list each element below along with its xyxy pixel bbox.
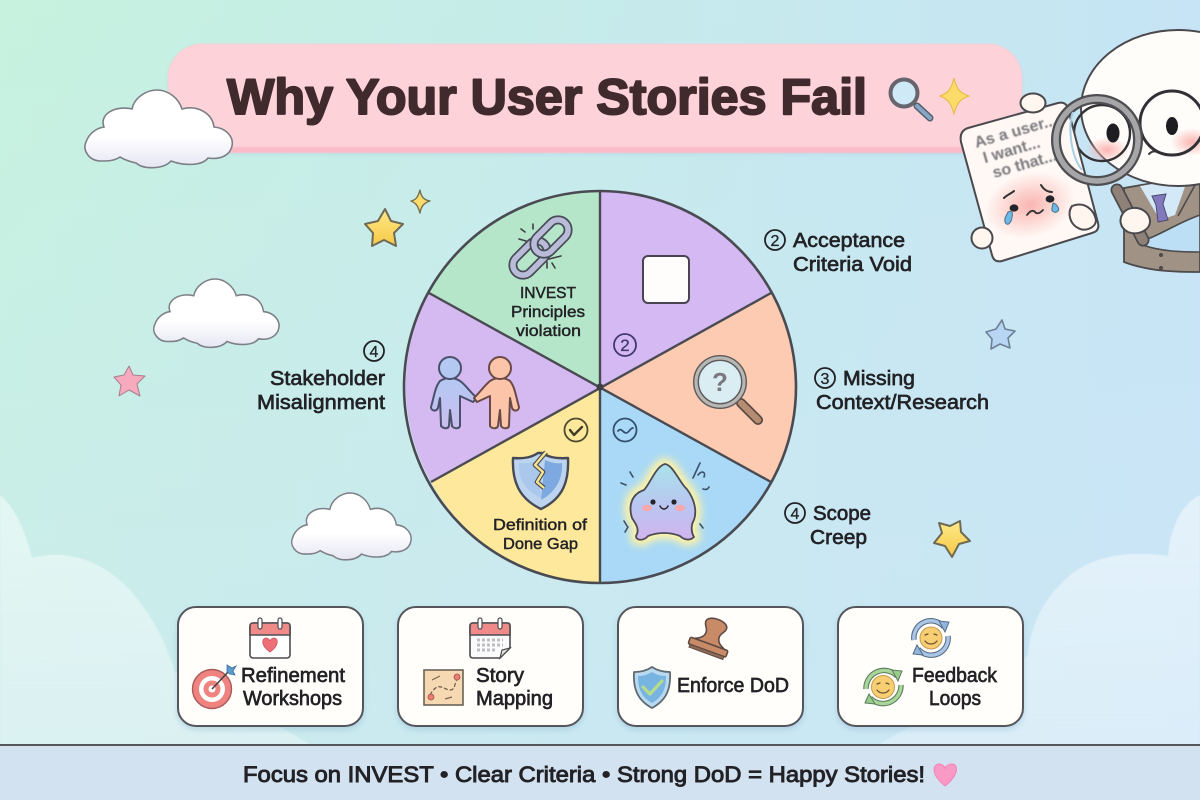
badge: 2: 2 [620,336,630,355]
star: blue [986,320,1015,349]
label: Missing Context/Research: Context/Research [816,392,989,414]
text: Loops [929,688,981,710]
card: Story Mapping [398,607,583,726]
sad user story document: so that... [991,148,1059,182]
star: yellow right [934,521,970,557]
icon: broken chain [509,216,572,279]
icon: stamp [687,613,737,660]
icon: map [424,670,463,705]
icon: target [192,665,236,708]
icon: title sparkle [940,78,969,114]
sad user story document: As a user... [973,112,1059,152]
icon: calendar heart [250,618,290,658]
text [476,665,553,710]
label: Scope Creep: 4 [791,506,800,523]
text: Definition of Done: Definition of [493,517,588,534]
icon: question magnifier: ? [712,367,728,397]
label: Acceptance Criteria Void: Acceptance [793,230,905,252]
card: Feedback Loops [838,607,1023,726]
star: pink [114,366,145,396]
title: Why Your User Stories Fail [227,69,867,125]
background cloud right [878,495,1200,745]
label: Acceptance Criteria Void: Criteria Void [793,254,912,276]
label: Stakeholder Misalignment: Misalignment [257,392,385,414]
slice: stakeholder [406,293,600,482]
label: Stakeholder Misalignment [257,341,385,414]
text: INVEST: INVEST [520,285,576,302]
text: INVEST [511,285,585,340]
text: Feedback [912,665,998,687]
text: Mapping [476,688,553,710]
label: Scope Creep: Scope [813,503,871,525]
cloud lower [292,493,411,560]
text: INVEST: Principles [511,304,585,321]
text: Definition of Done: Done Gap [503,536,578,553]
label: Acceptance Criteria Void [765,230,912,276]
icon: stakeholders shaking hands [431,357,519,428]
footer text: Focus on INVEST • Clear Criteria • Strong DoD = Happy Stories! [243,762,925,787]
badge: 2 [614,334,636,356]
label: Stakeholder Misalignment: 4 [370,344,379,361]
text [912,665,998,710]
magnifying glass [1056,99,1143,240]
icon: calendar [470,618,510,658]
text: Refinement [241,665,345,687]
title banner [168,44,1022,155]
sad user story document: I want... [981,135,1042,167]
label: Missing Context/Research [815,368,989,414]
sad user story document [961,103,1098,261]
text: Workshops [243,688,342,710]
text: Enforce DoD [677,675,789,697]
slice: scope creep [600,387,771,584]
icon: green feedback loop [865,670,902,704]
slice: INVEST [429,190,600,387]
card: Enforce DoD [618,607,803,726]
text: INVEST: violation [516,323,581,340]
icon: empty checkbox [643,256,689,303]
label: Scope Creep: Creep [810,527,867,549]
text: Story [476,665,524,687]
character: detective with sad user story [961,30,1200,272]
character body [1124,175,1200,272]
label: Missing Context/Research: 3 [821,371,830,388]
label: Missing Context/Research: Missing [843,368,915,390]
slice: missing context [600,293,795,482]
icon: broken shield [513,452,568,509]
footer bar [0,745,1200,800]
icon: pink heart [934,764,956,786]
icon: shield check [634,667,670,708]
person: blue [431,357,477,428]
person: orange [474,357,519,428]
icon: scope creep blob [621,463,709,540]
text [241,665,345,710]
card: Refinement Workshops [178,607,363,726]
icon: blue feedback loop [913,621,949,655]
pie chart [404,190,796,584]
slice: acceptance criteria [600,190,771,387]
hands [972,94,1096,248]
background cloud left [0,495,310,745]
badge: check [564,418,588,442]
label: Acceptance Criteria Void: 2 [771,233,780,250]
label: Scope Creep [785,503,871,549]
character head [1074,30,1200,186]
text: Definition of Done [493,517,588,553]
label: Stakeholder Misalignment: Stakeholder [270,368,385,390]
star: yellow left [365,209,403,246]
icon: title magnifier [890,80,930,118]
slice: definition of done [431,387,600,584]
star: small sparkle [411,190,430,213]
badge: wave [614,418,636,442]
hand on handle [1121,208,1150,233]
icon: question magnifier [696,358,758,420]
cloud middle [154,279,279,347]
cloud top left [85,90,232,168]
